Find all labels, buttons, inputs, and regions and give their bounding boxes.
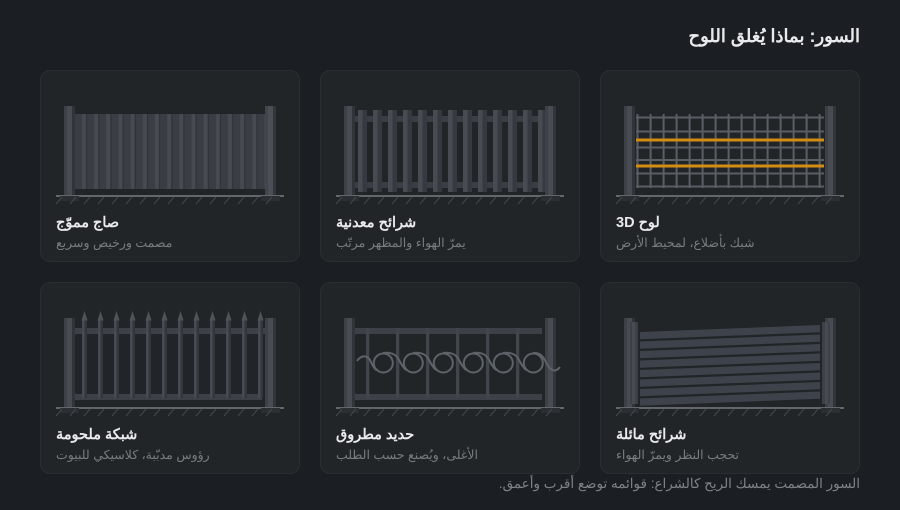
illustration: wrought iron fence [336,318,564,416]
illustration: corrugated sheet fence [56,106,284,204]
panel: welded mesh [40,282,300,474]
panel: tilted slats [600,282,860,474]
panel title: شرائح معدنية [336,215,416,231]
panel title: شرائح مائلة [616,427,686,443]
illustration: spear-top fence [56,312,284,416]
panel description: شبك بأضلاع، لمحيط الأرض [616,236,755,250]
panel: wrought iron [320,282,580,474]
panel description: يمرّ الهواء والمظهر مرتّب [336,236,466,250]
panel title: لوح 3D [616,215,660,231]
panel title: صاج مموّج [56,215,119,231]
panel description: تحجب النظر ويمرّ الهواء [616,448,739,462]
panel: 3D panel [600,70,860,262]
footer note: السور المصمت يمسك الريح كالشراع: قوائمه توضع أقرب وأعمق. [499,476,860,491]
panel description: مصمت ورخيص وسريع [56,236,172,250]
illustration: 3D mesh fence [616,106,844,204]
illustration: louvered fence [616,318,844,416]
panel: corrugated sheet [40,70,300,262]
panel description: الأغلى، ويُصنع حسب الطلب [336,448,478,462]
illustration: metal slat fence [336,106,564,204]
panel: metal slats [320,70,580,262]
panel description: رؤوس مدبّبة، كلاسيكي للبيوت [56,448,210,462]
panel title: حديد مطروق [336,427,414,443]
panel title: شبكة ملحومة [56,427,137,443]
title: السور: بماذا يُغلق اللوح [689,26,860,46]
